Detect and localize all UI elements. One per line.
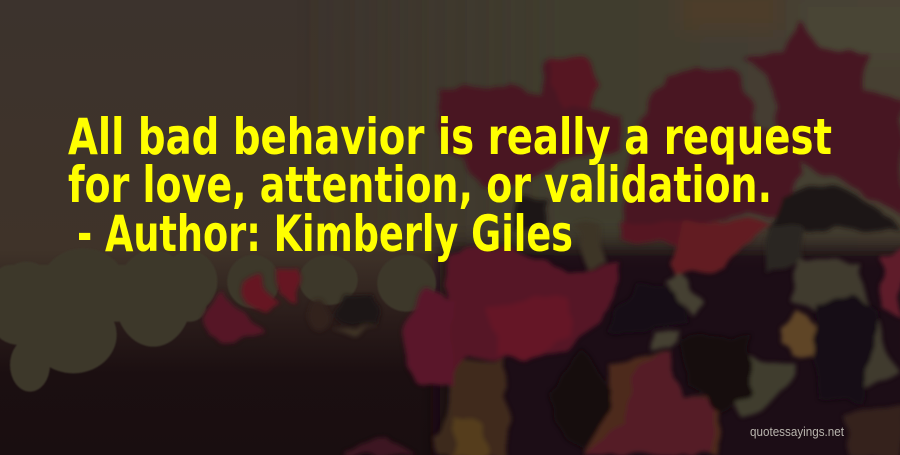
watermark: quotessayings.net	[750, 425, 844, 439]
author attribution: - Author: Kimberly Giles	[77, 205, 573, 263]
lower right flowers and leaves	[447, 222, 900, 455]
pale blurred blossoms lower left	[0, 248, 436, 392]
quote text	[68, 108, 832, 263]
top flowers	[440, 20, 900, 230]
lower left flowers	[203, 268, 453, 455]
